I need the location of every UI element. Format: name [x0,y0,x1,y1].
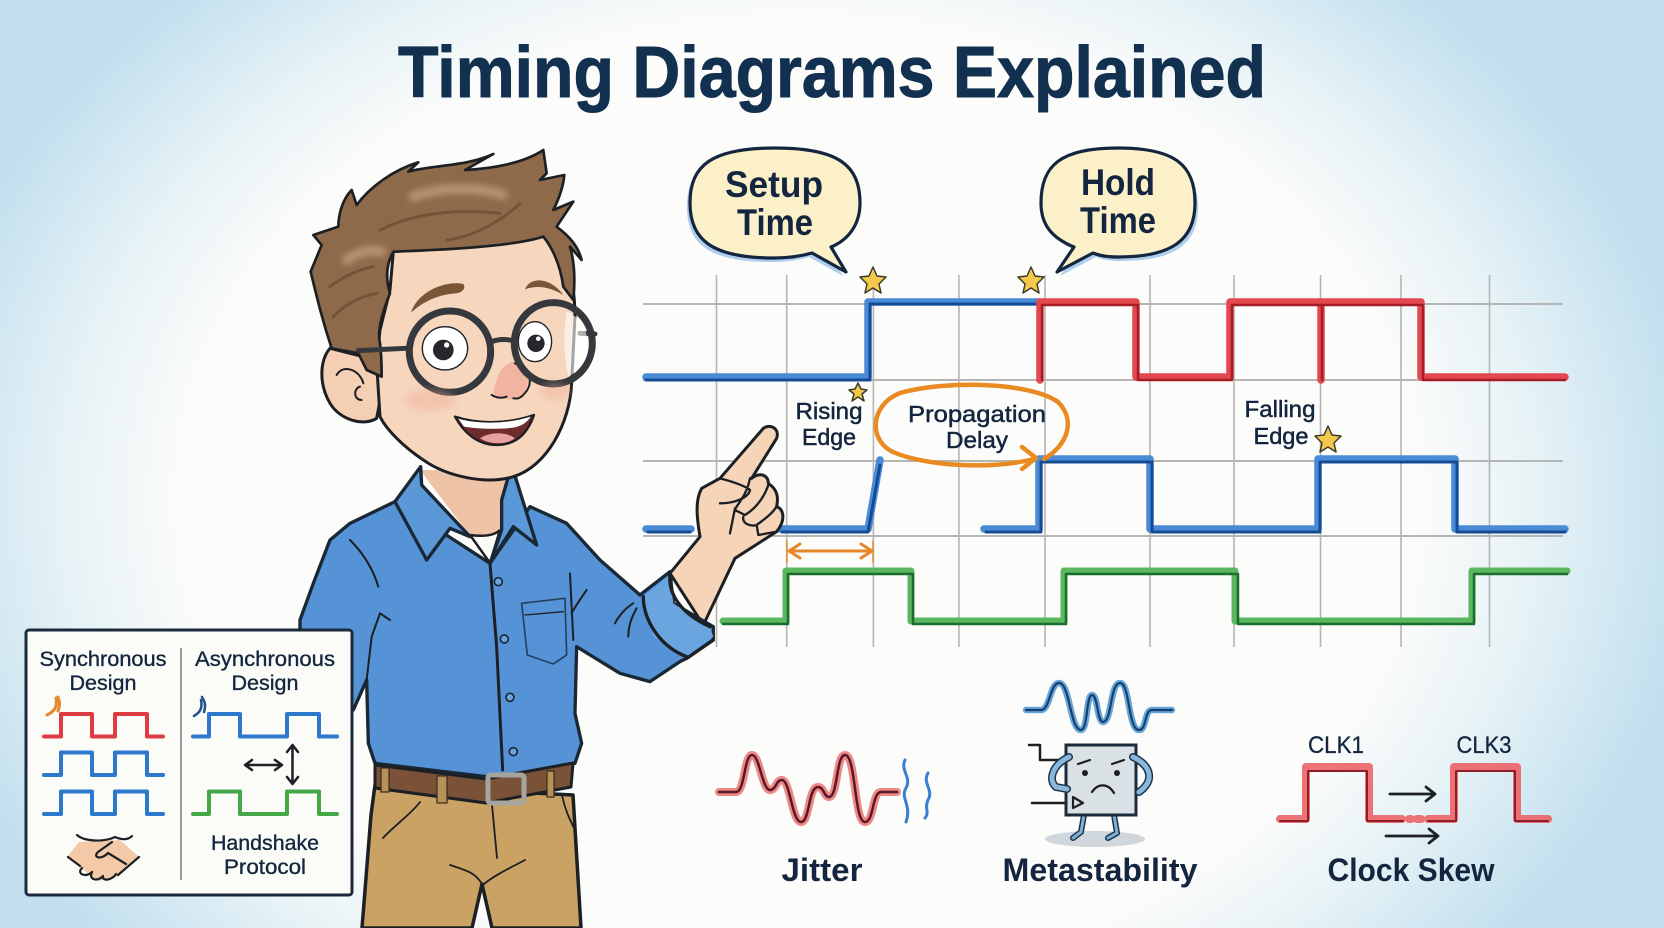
icon: handshake [67,835,139,881]
asynchronous waveforms [193,714,337,814]
ear [322,348,383,422]
label: handshake protocol: Handshake [211,832,319,855]
heading: asynchronous design [195,648,335,695]
callout: propagation delay [876,385,1068,469]
jitter wiggles [904,760,930,822]
signal: red clock line [1040,302,1565,380]
character: presenter [300,150,783,928]
neck [420,470,515,536]
label: falling edge: Edge [1254,423,1308,449]
panel: synchronous vs asynchronous [26,630,352,895]
speech bubble: hold time: Time [1080,200,1156,241]
icon: worried flip-flop [1029,745,1149,847]
heading: synchronous design: Synchronous [40,648,166,671]
label: handshake protocol [211,832,319,879]
icon: blue edge marker [194,697,205,716]
belt [375,763,573,803]
speech bubble: setup time [687,148,860,276]
eyes [422,322,552,370]
signal: green line [723,571,1567,624]
label: CLK3: CLK3 [1456,732,1512,759]
icon: orange edge marker [47,697,60,715]
concept: metastability [1002,683,1198,888]
label: rising edge [796,398,862,450]
mouth [455,415,534,445]
speech bubble: hold time: Hold [1081,162,1155,203]
speech bubble: setup time: Time [737,202,813,243]
arrows: handshake signalling [245,745,298,784]
icon: stars [849,267,1341,452]
label: falling edge: Falling [1244,396,1316,422]
face [377,233,575,480]
synchronous waveforms [44,714,163,814]
label: metastability: Metastability [1002,852,1198,888]
label: CLK1: CLK1 [1308,732,1364,759]
jitter waveform [719,755,897,822]
speech bubble: setup time: Setup [725,164,823,205]
glasses [358,303,595,392]
concept: jitter [719,755,930,888]
metastable waveform [1026,683,1172,730]
speech bubble: hold time [1041,148,1198,276]
undershirt [470,530,500,563]
arrows: skew direction [1386,787,1438,843]
timing diagram [643,267,1567,647]
hand [670,426,783,625]
label: clock skew: Clock Skew [1328,852,1495,888]
clock waveforms [1280,767,1548,821]
arrow: setup interval [787,541,873,562]
eyebrows [411,280,563,313]
signal: blue output line [646,459,1565,532]
head [311,150,595,480]
concept: clock skew [1280,732,1548,888]
signal: blue data line [646,302,1040,380]
cheeks [405,384,570,411]
label: rising edge: Rising [796,398,862,424]
label: falling edge [1244,396,1316,449]
label: rising edge: Edge [802,424,856,450]
label: jitter: Jitter [782,852,862,888]
shirt [300,502,713,778]
nose [492,362,530,400]
collar [395,465,537,563]
lens glare [564,312,588,377]
callout: propagation delay: Propagation [908,401,1046,427]
heading: synchronous design [40,648,166,695]
heading: asynchronous design: Design [232,672,298,695]
hair [311,150,582,377]
grid [643,275,1563,647]
callout: propagation delay: Delay [946,427,1009,453]
title: Timing Diagrams Explained [398,33,1266,113]
heading: asynchronous design: Asynchronous [195,648,335,671]
pants [362,785,581,928]
label: handshake protocol: Protocol [224,856,306,879]
heading: synchronous design: Design [70,672,136,695]
